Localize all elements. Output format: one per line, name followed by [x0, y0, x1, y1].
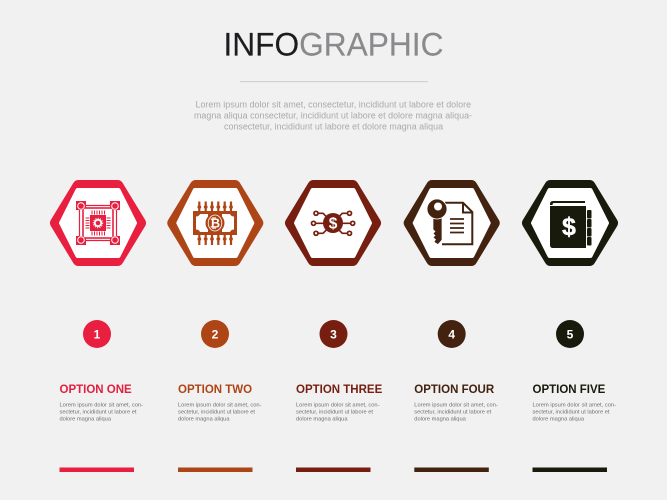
- heading: OPTION FIVE: [532, 384, 606, 396]
- panel: option four: [410, 186, 498, 472]
- heading: OPTION ONE: [60, 384, 132, 396]
- hexagon 1: [56, 186, 140, 260]
- heading: OPTION THREE: [296, 384, 383, 396]
- description: [60, 402, 143, 422]
- heading: OPTION FOUR: [414, 384, 495, 396]
- number badge 4: 4: [448, 328, 455, 342]
- bar: [532, 468, 607, 472]
- description: [296, 402, 380, 422]
- description: sectetur, incididunt ut labore et: [60, 410, 137, 416]
- number badge 1: [83, 320, 111, 348]
- icon: bitcoin banknote chip: [193, 202, 237, 245]
- description: dolore magna aliqua: [60, 416, 112, 422]
- hexagon 2: [173, 186, 257, 260]
- hexagon 5: [528, 186, 612, 260]
- description: Lorem ipsum dolor sit amet, con-: [178, 402, 262, 408]
- panel: option five: [528, 186, 616, 472]
- description: Lorem ipsum dolor sit amet, con-: [532, 402, 616, 408]
- title: INFOGRAPHIC: [224, 26, 444, 62]
- description: dolore magna aliqua: [414, 416, 467, 422]
- hexagon 4: [410, 186, 494, 260]
- icon: key and document: [427, 199, 472, 244]
- bar: [178, 468, 252, 472]
- description: sectetur, incididunt ut labore et: [178, 410, 255, 416]
- panel: option one: [56, 186, 143, 472]
- number badge 2: 2: [212, 328, 219, 342]
- description: [532, 402, 616, 422]
- bar: [414, 468, 489, 472]
- panel: option two: [173, 186, 262, 472]
- hexagon 3: [291, 186, 375, 260]
- intro text: Lorem ipsum dolor sit amet, consectetur, incididunt ut labore et dolore: [196, 100, 471, 110]
- number badge 2: [201, 320, 229, 348]
- intro text: magna aliqua consectetur, incididunt ut labore et dolore magna aliqua-: [194, 110, 472, 120]
- description: sectetur, incididunt ut labore et: [414, 410, 492, 416]
- icon: bitcoin banknote chip: ₿: [210, 216, 220, 230]
- panel: option three: [291, 186, 383, 472]
- heading: OPTION TWO: [178, 384, 252, 396]
- description: dolore magna aliqua: [296, 416, 348, 422]
- icon: dollar circuit: $: [329, 216, 338, 232]
- description: [178, 402, 262, 422]
- number badge 3: [320, 320, 348, 348]
- intro text: consectetur, incididunt ut labore et dolore magna aliqua: [224, 122, 443, 132]
- description: sectetur, incididunt ut labore et: [532, 410, 610, 416]
- icon: processor chip with gear: [76, 201, 120, 245]
- bar: [60, 468, 134, 472]
- intro text: [194, 100, 472, 132]
- number badge 3: 3: [330, 328, 337, 342]
- description: sectetur, incididunt ut labore et: [296, 410, 373, 416]
- description: dolore magna aliqua: [532, 416, 585, 422]
- number badge 1: 1: [94, 328, 101, 342]
- description: Lorem ipsum dolor sit amet, con-: [60, 402, 143, 408]
- icon: dollar ledger book: $: [562, 213, 576, 241]
- icon: dollar circuit: [312, 211, 355, 235]
- description: [414, 402, 498, 422]
- number badge 4: [438, 320, 466, 348]
- description: Lorem ipsum dolor sit amet, con-: [296, 402, 380, 408]
- description: Lorem ipsum dolor sit amet, con-: [414, 402, 498, 408]
- icon: dollar ledger book: [550, 201, 592, 248]
- number badge 5: 5: [567, 328, 574, 342]
- bar: [296, 468, 370, 472]
- description: dolore magna aliqua: [178, 416, 230, 422]
- number badge 5: [556, 320, 584, 348]
